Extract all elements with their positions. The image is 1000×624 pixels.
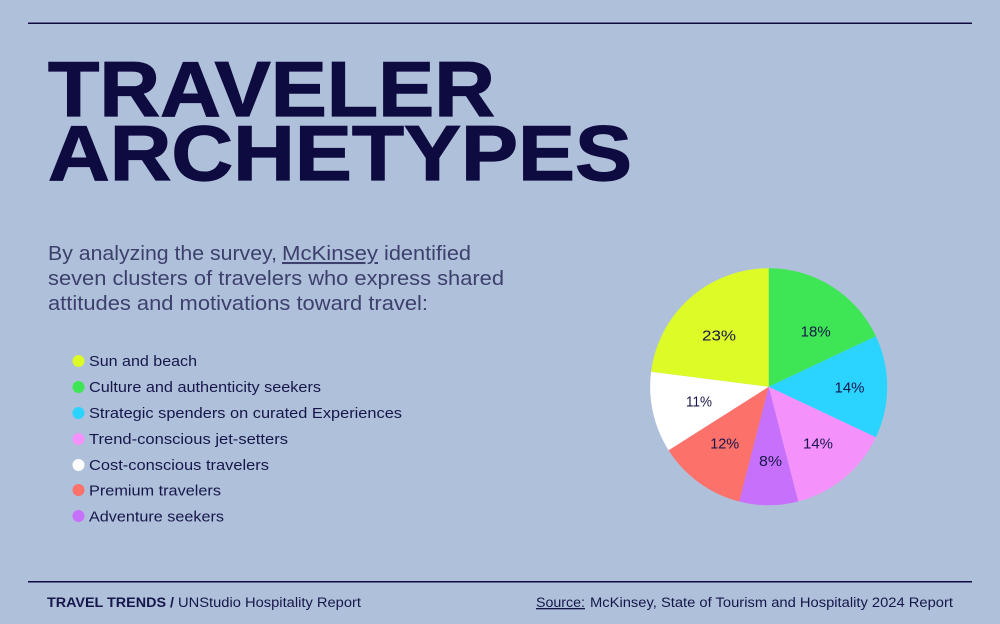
pie percentage labels: 14%	[803, 436, 833, 452]
title	[48, 45, 632, 197]
legend item: trend-conscious jet-setters: Trend-conscious jet-setters	[89, 431, 288, 448]
intro paragraph	[48, 242, 504, 315]
legend item: premium travelers: Premium travelers	[89, 482, 221, 500]
legend item: culture and authenticity seekers: Culture and authenticity seekers	[89, 379, 321, 396]
pie percentage labels: 18%	[801, 324, 831, 340]
pie percentage labels	[686, 324, 865, 470]
intro paragraph: seven clusters of travelers who express shared	[48, 267, 504, 290]
footer left: report name	[47, 595, 361, 610]
intro paragraph: McKinsey	[282, 242, 379, 265]
title: ARCHETYPES	[48, 109, 632, 197]
footer left: report name: TRAVEL TRENDS /	[47, 595, 174, 610]
footer right: source: Source:	[536, 595, 585, 610]
pie percentage labels: 11%	[686, 394, 712, 410]
legend item: strategic spenders: Strategic spenders on curated Experiences	[89, 405, 402, 422]
pie chart	[650, 268, 887, 505]
pie percentage labels: 14%	[834, 380, 865, 396]
legend item: adventure seekers: Adventure seekers	[89, 508, 224, 526]
intro paragraph: By analyzing the survey,	[48, 242, 277, 265]
footer left: report name: UNStudio Hospitality Report	[178, 595, 361, 610]
pie percentage labels: 8%	[759, 454, 782, 470]
legend item: sun and beach: Sun and beach	[89, 353, 197, 370]
pie percentage labels: 23%	[702, 328, 736, 344]
intro paragraph: attitudes and motivations toward travel:	[48, 292, 428, 315]
intro paragraph: identified	[384, 242, 471, 265]
title: TRAVELER	[48, 45, 495, 133]
legend item: cost-conscious travelers: Cost-conscious travelers	[89, 457, 269, 474]
legend	[72, 353, 402, 526]
pie percentage labels: 12%	[710, 436, 739, 452]
footer right: source: McKinsey, State of Tourism and Hospitality 2024 Report	[590, 595, 953, 610]
